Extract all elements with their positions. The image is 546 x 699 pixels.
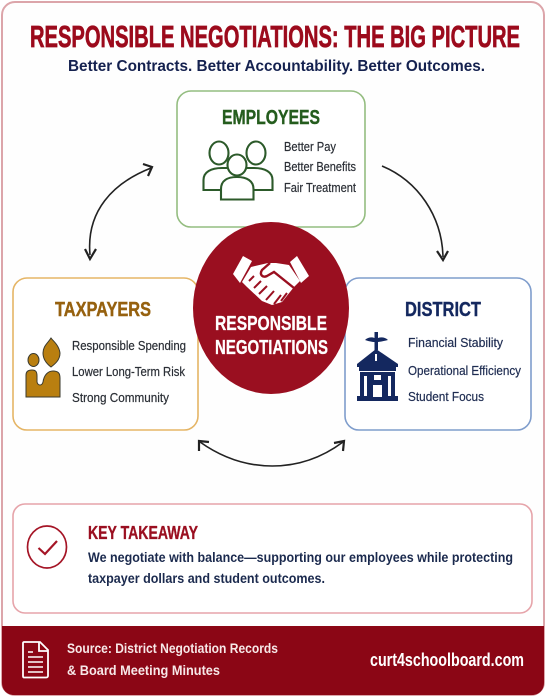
icon: check mark bbox=[28, 526, 66, 568]
key takeaway body: taxpayer dollars and student outcomes. bbox=[88, 571, 325, 586]
panel: district bbox=[345, 278, 531, 430]
taxpayers benefits list: Lower Long-Term Risk bbox=[72, 365, 186, 379]
key takeaway heading: KEY TAKEAWAY bbox=[88, 523, 198, 543]
circle label: RESPONSIBLE bbox=[215, 313, 327, 335]
icon: school building bbox=[357, 332, 398, 401]
district benefits list: Student Focus bbox=[408, 390, 484, 404]
center circle: responsible negotiations: NEGOTIATIONS bbox=[215, 337, 328, 359]
footer bar bbox=[2, 626, 544, 695]
panel: employees bbox=[177, 91, 365, 227]
taxpayers heading: TAXPAYERS bbox=[55, 299, 151, 321]
taxpayers benefits list bbox=[72, 339, 186, 405]
arrow: taxpayers and district bbox=[199, 441, 344, 466]
panel: taxpayers bbox=[13, 278, 198, 430]
key takeaway body bbox=[88, 550, 513, 586]
taxpayers benefits list: Responsible Spending bbox=[72, 339, 186, 353]
panel: key takeaway bbox=[13, 504, 532, 613]
arrow: employees to district bbox=[382, 166, 448, 260]
employees benefits list bbox=[284, 140, 356, 195]
arrow: taxpayers to employees bbox=[85, 164, 152, 259]
icon: taxpayer and tree bbox=[26, 338, 60, 397]
employees benefits list: Better Pay bbox=[284, 140, 337, 154]
key takeaway body: We negotiate with balance—supporting our employees while protecting bbox=[88, 550, 513, 565]
icon: employees group bbox=[204, 142, 272, 200]
employees benefits list: Fair Treatment bbox=[284, 181, 356, 195]
district heading: DISTRICT bbox=[405, 299, 481, 321]
employees heading: EMPLOYEES bbox=[222, 107, 320, 129]
icon: document bbox=[23, 642, 48, 678]
district benefits list: Operational Efficiency bbox=[408, 364, 522, 378]
icon: handshake bbox=[233, 256, 309, 305]
subtitle: Better Contracts. Better Accountability. Better Outcomes. bbox=[68, 58, 485, 75]
district benefits list: Financial Stability bbox=[408, 336, 504, 350]
source text bbox=[67, 641, 278, 678]
center circle: responsible negotiations bbox=[193, 222, 349, 394]
source text: Source: District Negotiation Records bbox=[67, 641, 278, 656]
taxpayers benefits list: Strong Community bbox=[72, 391, 170, 405]
employees benefits list: Better Benefits bbox=[284, 160, 356, 174]
source text: & Board Meeting Minutes bbox=[67, 663, 220, 678]
district benefits list bbox=[408, 336, 522, 404]
